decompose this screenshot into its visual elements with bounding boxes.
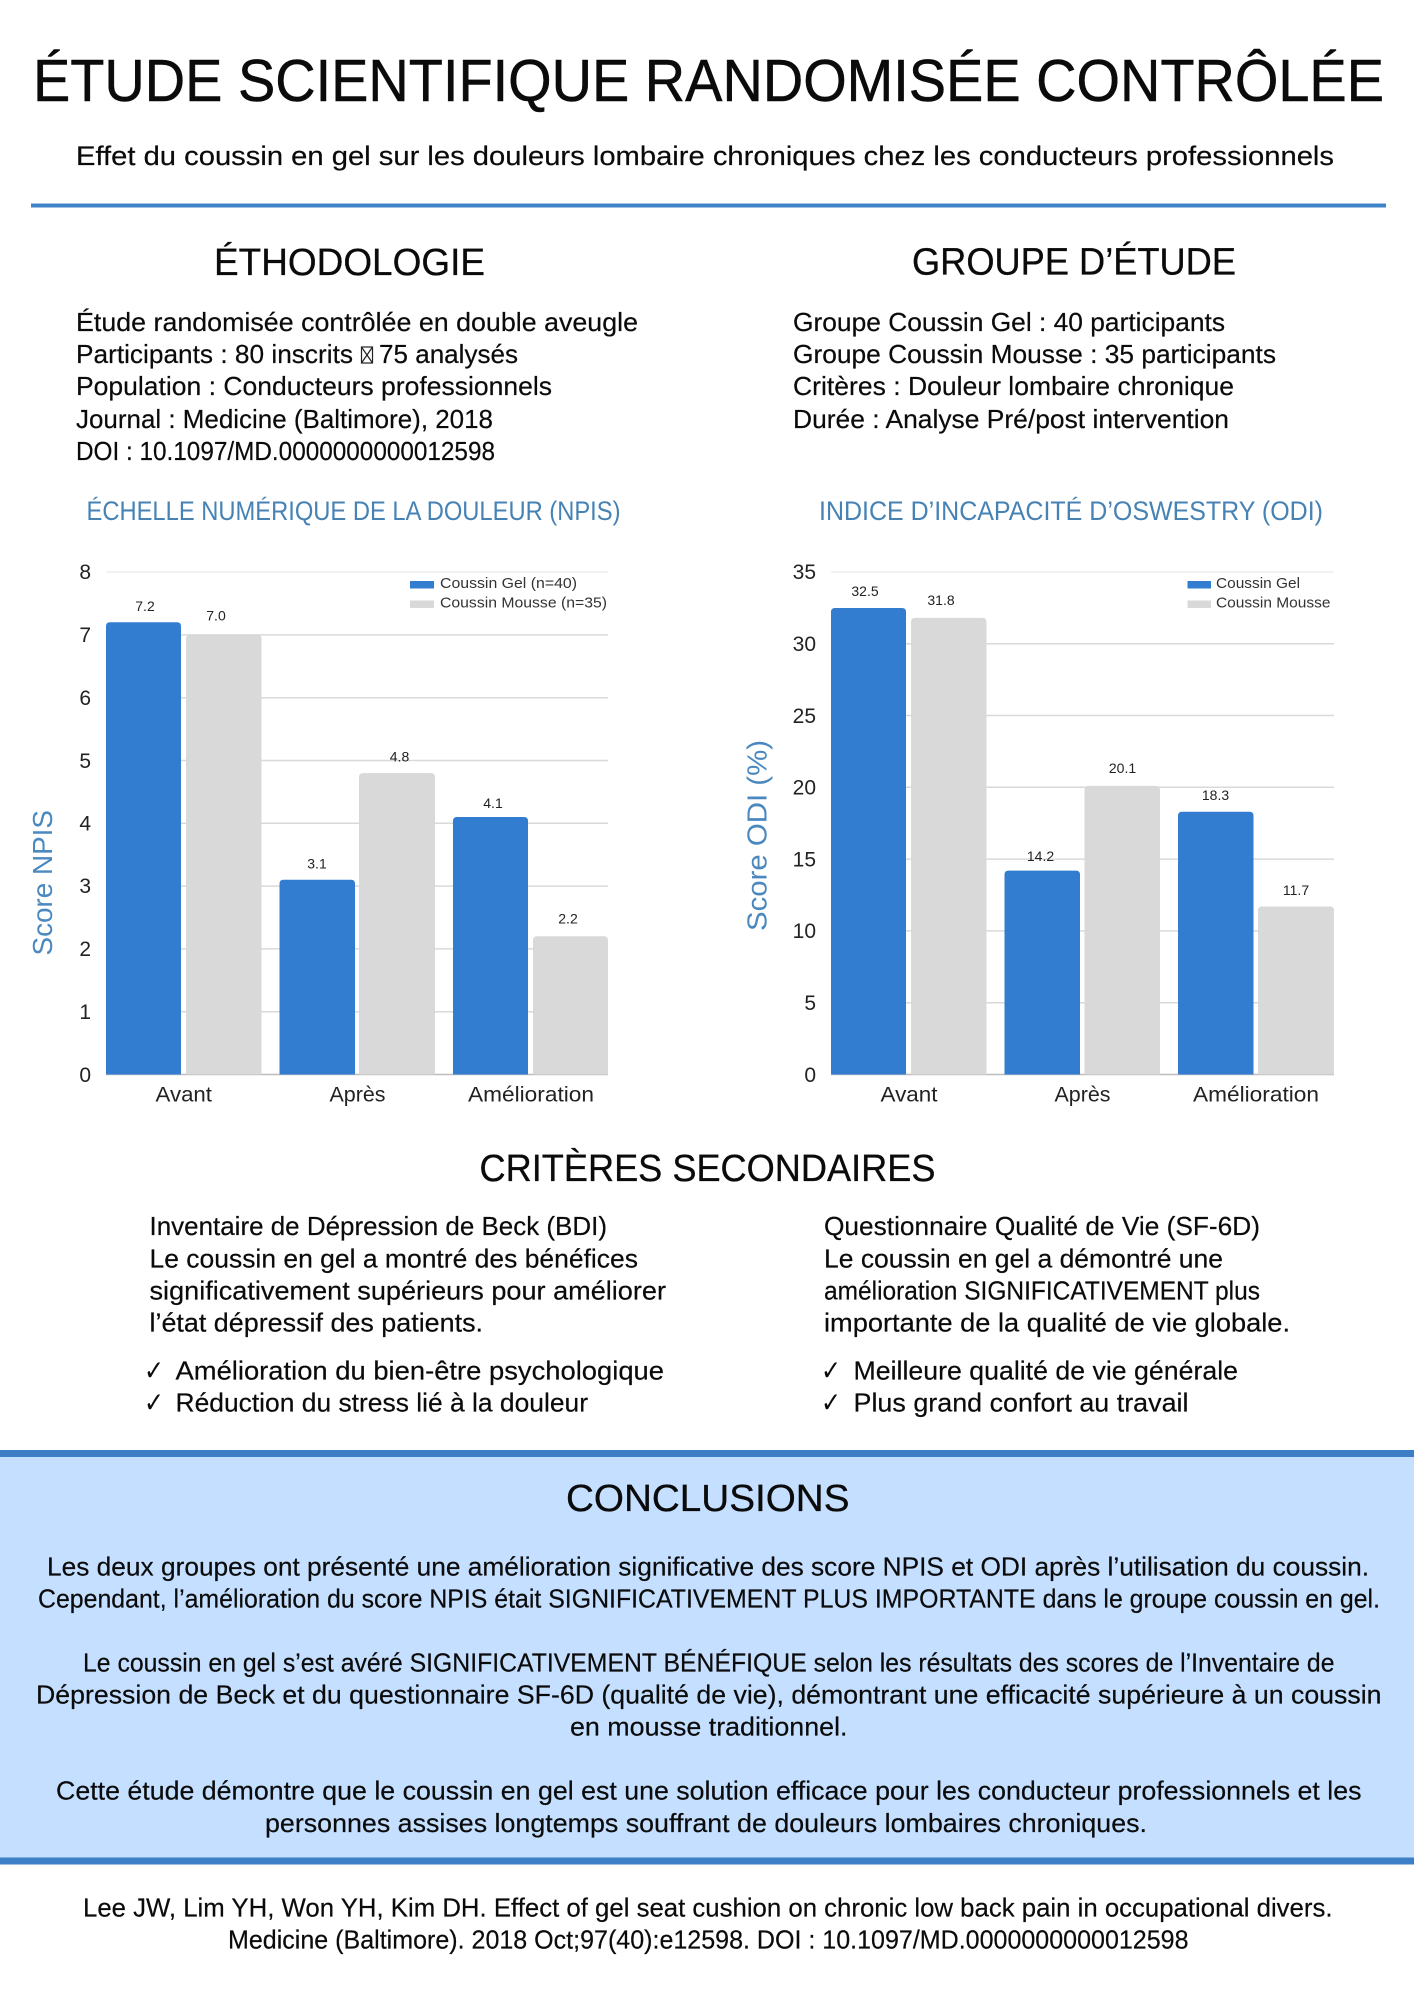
bar chart: NPIS: 2 <box>79 938 91 961</box>
bar chart: ODI: 25 <box>793 705 816 728</box>
bar chart: NPIS: 4.1 <box>483 795 503 811</box>
bar chart: ODI: 31.8 <box>927 592 955 608</box>
text block: méthodologie: Journal : Medicine (Baltimore), 2018 <box>76 404 493 434</box>
conclusion paragraph 2: Dépression de Beck et du questionnaire SF-6D (qualité de vie), démontrant une efficacité supérieure à un coussin <box>36 1680 1381 1710</box>
text block: BDI <box>150 1211 666 1338</box>
bar chart: ODI: 5 <box>804 992 816 1015</box>
conclusion paragraph 2: en mousse traditionnel. <box>570 1712 848 1742</box>
conclusion paragraph 1 <box>38 1552 1380 1614</box>
bar chart: NPIS: Score NPIS <box>27 810 58 956</box>
citation: Lee JW, Lim YH, Won YH, Kim DH. Effect of gel seat cushion on chronic low back pain in occupational divers. <box>83 1892 1332 1922</box>
text block: méthodologie: Participants : 80 inscrits <box>76 339 353 369</box>
text block: groupe d'étude: Groupe Coussin Mousse : 35 participants <box>793 339 1276 369</box>
checklist: SF-6D: Plus grand confort au travail <box>854 1388 1188 1418</box>
citation: Medicine (Baltimore). 2018 Oct;97(40):e12598. DOI : 10.1097/MD.0000000000012598 <box>228 1924 1188 1954</box>
heading: critères secondaires: CRITÈRES SECONDAIRES <box>480 1147 936 1190</box>
bar chart: ODI: Amélioration <box>1193 1084 1319 1106</box>
bar chart: ODI: 20 <box>793 776 816 800</box>
conclusion paragraph 3: personnes assises longtemps souffrant de douleurs lombaires chroniques. <box>265 1808 1147 1838</box>
heading: conclusions: CONCLUSIONS <box>566 1478 850 1520</box>
text block: groupe d'étude <box>793 307 1276 434</box>
bar chart: ODI: Après <box>1054 1084 1110 1106</box>
bar chart: NPIS: 5 <box>79 750 91 773</box>
text block: SF-6D: Le coussin en gel a démontré une <box>824 1244 1223 1274</box>
chart heading: ODI: INDICE D’INCAPACITÉ D’OSWESTRY (ODI) <box>819 496 1323 526</box>
conclusion paragraph 1: Les deux groupes ont présenté une amélioration significative des score NPIS et ODI après l’utilisation du coussin. <box>47 1552 1369 1582</box>
conclusion paragraph 2 <box>36 1648 1381 1742</box>
text block: BDI: Le coussin en gel a montré des bénéfices <box>150 1244 638 1274</box>
bar chart: ODI: Coussin Mousse <box>1216 594 1330 612</box>
checklist: BDI: Amélioration du bien-être psychologique <box>176 1356 664 1386</box>
text block: SF-6D <box>824 1211 1290 1338</box>
bar chart: NPIS: 7 <box>79 624 91 647</box>
bar chart: NPIS: Avant <box>156 1084 212 1106</box>
bar chart: NPIS: 3 <box>79 875 91 898</box>
bar chart: NPIS: 8 <box>79 561 91 584</box>
bar chart: NPIS: 2.2 <box>558 910 578 926</box>
bar chart: ODI: 35 <box>793 561 816 584</box>
bar chart: ODI: 18.3 <box>1202 787 1229 803</box>
text block: méthodologie: 75 analysés <box>379 339 518 369</box>
bar chart: NPIS: 7.2 <box>135 598 155 614</box>
bar chart: ODI: 14.2 <box>1027 848 1054 864</box>
text block: BDI: significativement supérieurs pour améliorer <box>150 1276 666 1306</box>
bar chart: NPIS: 6 <box>79 687 91 710</box>
panel: conclusions <box>0 1450 1414 1864</box>
checklist: BDI: ✓ <box>144 1354 164 1387</box>
bar chart: ODI: Avant <box>880 1084 938 1106</box>
bar chart: ODI: 10 <box>793 920 816 943</box>
bar chart: NPIS: Amélioration <box>468 1084 594 1106</box>
checklist: SF-6D: ✓ <box>821 1354 841 1387</box>
bar chart: NPIS: 0 <box>79 1064 91 1087</box>
bar chart: ODI: 15 <box>793 848 816 872</box>
citation <box>83 1892 1332 1954</box>
heading: groupe d'étude: GROUPE D’ÉTUDE <box>912 240 1236 284</box>
text block: SF-6D: importante de la qualité de vie globale. <box>824 1308 1290 1338</box>
text block: méthodologie: Étude randomisée contrôlée en double aveugle <box>76 307 638 337</box>
text block: SF-6D: Questionnaire Qualité de Vie (SF-6D) <box>824 1211 1260 1241</box>
text block: groupe d'étude: Critères : Douleur lombaire chronique <box>793 371 1234 401</box>
bar chart: NPIS: Après <box>330 1084 386 1106</box>
text block: groupe d'étude: Groupe Coussin Gel : 40 participants <box>793 307 1225 337</box>
bar chart: NPIS: 4 <box>79 812 91 836</box>
conclusion paragraph 2: Le coussin en gel s’est avéré SIGNIFICATIVEMENT BÉNÉFIQUE selon les résultats des scores de l’Inventaire de <box>83 1648 1334 1678</box>
bar chart: NPIS: 3.1 <box>307 856 327 872</box>
text block: méthodologie <box>76 307 638 466</box>
bar chart: ODI <box>742 561 1334 1106</box>
bar chart: NPIS: 1 <box>79 1001 91 1024</box>
subtitle: Effet du coussin en gel sur les douleurs lombaire chroniques chez les conducteurs professionnels <box>76 141 1334 171</box>
bar chart: NPIS: Coussin Mousse (n=35) <box>440 594 607 612</box>
checklist: BDI: Réduction du stress lié à la douleur <box>176 1388 588 1418</box>
checklist: SF-6D: ✓ <box>821 1386 841 1419</box>
chart heading: NPIS: ÉCHELLE NUMÉRIQUE DE LA DOULEUR (NPIS) <box>86 496 620 526</box>
bar chart: NPIS: 4.8 <box>390 748 409 764</box>
bar chart: ODI: 0 <box>804 1064 816 1087</box>
conclusion paragraph 3: Cette étude démontre que le coussin en gel est une solution efficace pour les conducteur professionnels et les <box>56 1776 1361 1806</box>
bar chart: ODI: Score ODI (%) <box>742 740 772 931</box>
bar chart: NPIS: Coussin Gel (n=40) <box>440 575 577 592</box>
checklist: SF-6D <box>821 1354 1238 1419</box>
text block: BDI: l’état dépressif des patients. <box>150 1308 483 1338</box>
heading: méthodologie: ÉTHODOLOGIE <box>214 241 485 284</box>
checklist: BDI <box>144 1354 664 1419</box>
conclusion paragraph 1: Cependant, l’amélioration du score NPIS était SIGNIFICATIVEMENT PLUS IMPORTANTE dans le groupe coussin en gel. <box>38 1584 1380 1614</box>
bar chart: ODI: 30 <box>793 633 816 656</box>
text block: méthodologie: DOI : 10.1097/MD.0000000000012598 <box>76 436 495 466</box>
bar chart: ODI: Coussin Gel <box>1216 575 1300 592</box>
bar chart: ODI: 32.5 <box>851 583 879 599</box>
checklist: SF-6D: Meilleure qualité de vie générale <box>854 1356 1238 1386</box>
bar chart: NPIS: 7.0 <box>206 608 226 624</box>
text block: groupe d'étude: Durée : Analyse Pré/post intervention <box>793 404 1229 434</box>
text block: BDI: Inventaire de Dépression de Beck (BDI) <box>150 1211 607 1241</box>
text block: méthodologie: Population : Conducteurs professionnels <box>76 371 552 401</box>
text block: SF-6D: amélioration SIGNIFICATIVEMENT plus <box>824 1276 1260 1306</box>
bar chart: ODI: 11.7 <box>1283 882 1309 898</box>
conclusion paragraph 3 <box>56 1776 1361 1838</box>
checklist: BDI: ✓ <box>144 1386 164 1419</box>
bar chart: ODI: 20.1 <box>1109 760 1136 776</box>
bar chart: NPIS <box>27 561 608 1106</box>
